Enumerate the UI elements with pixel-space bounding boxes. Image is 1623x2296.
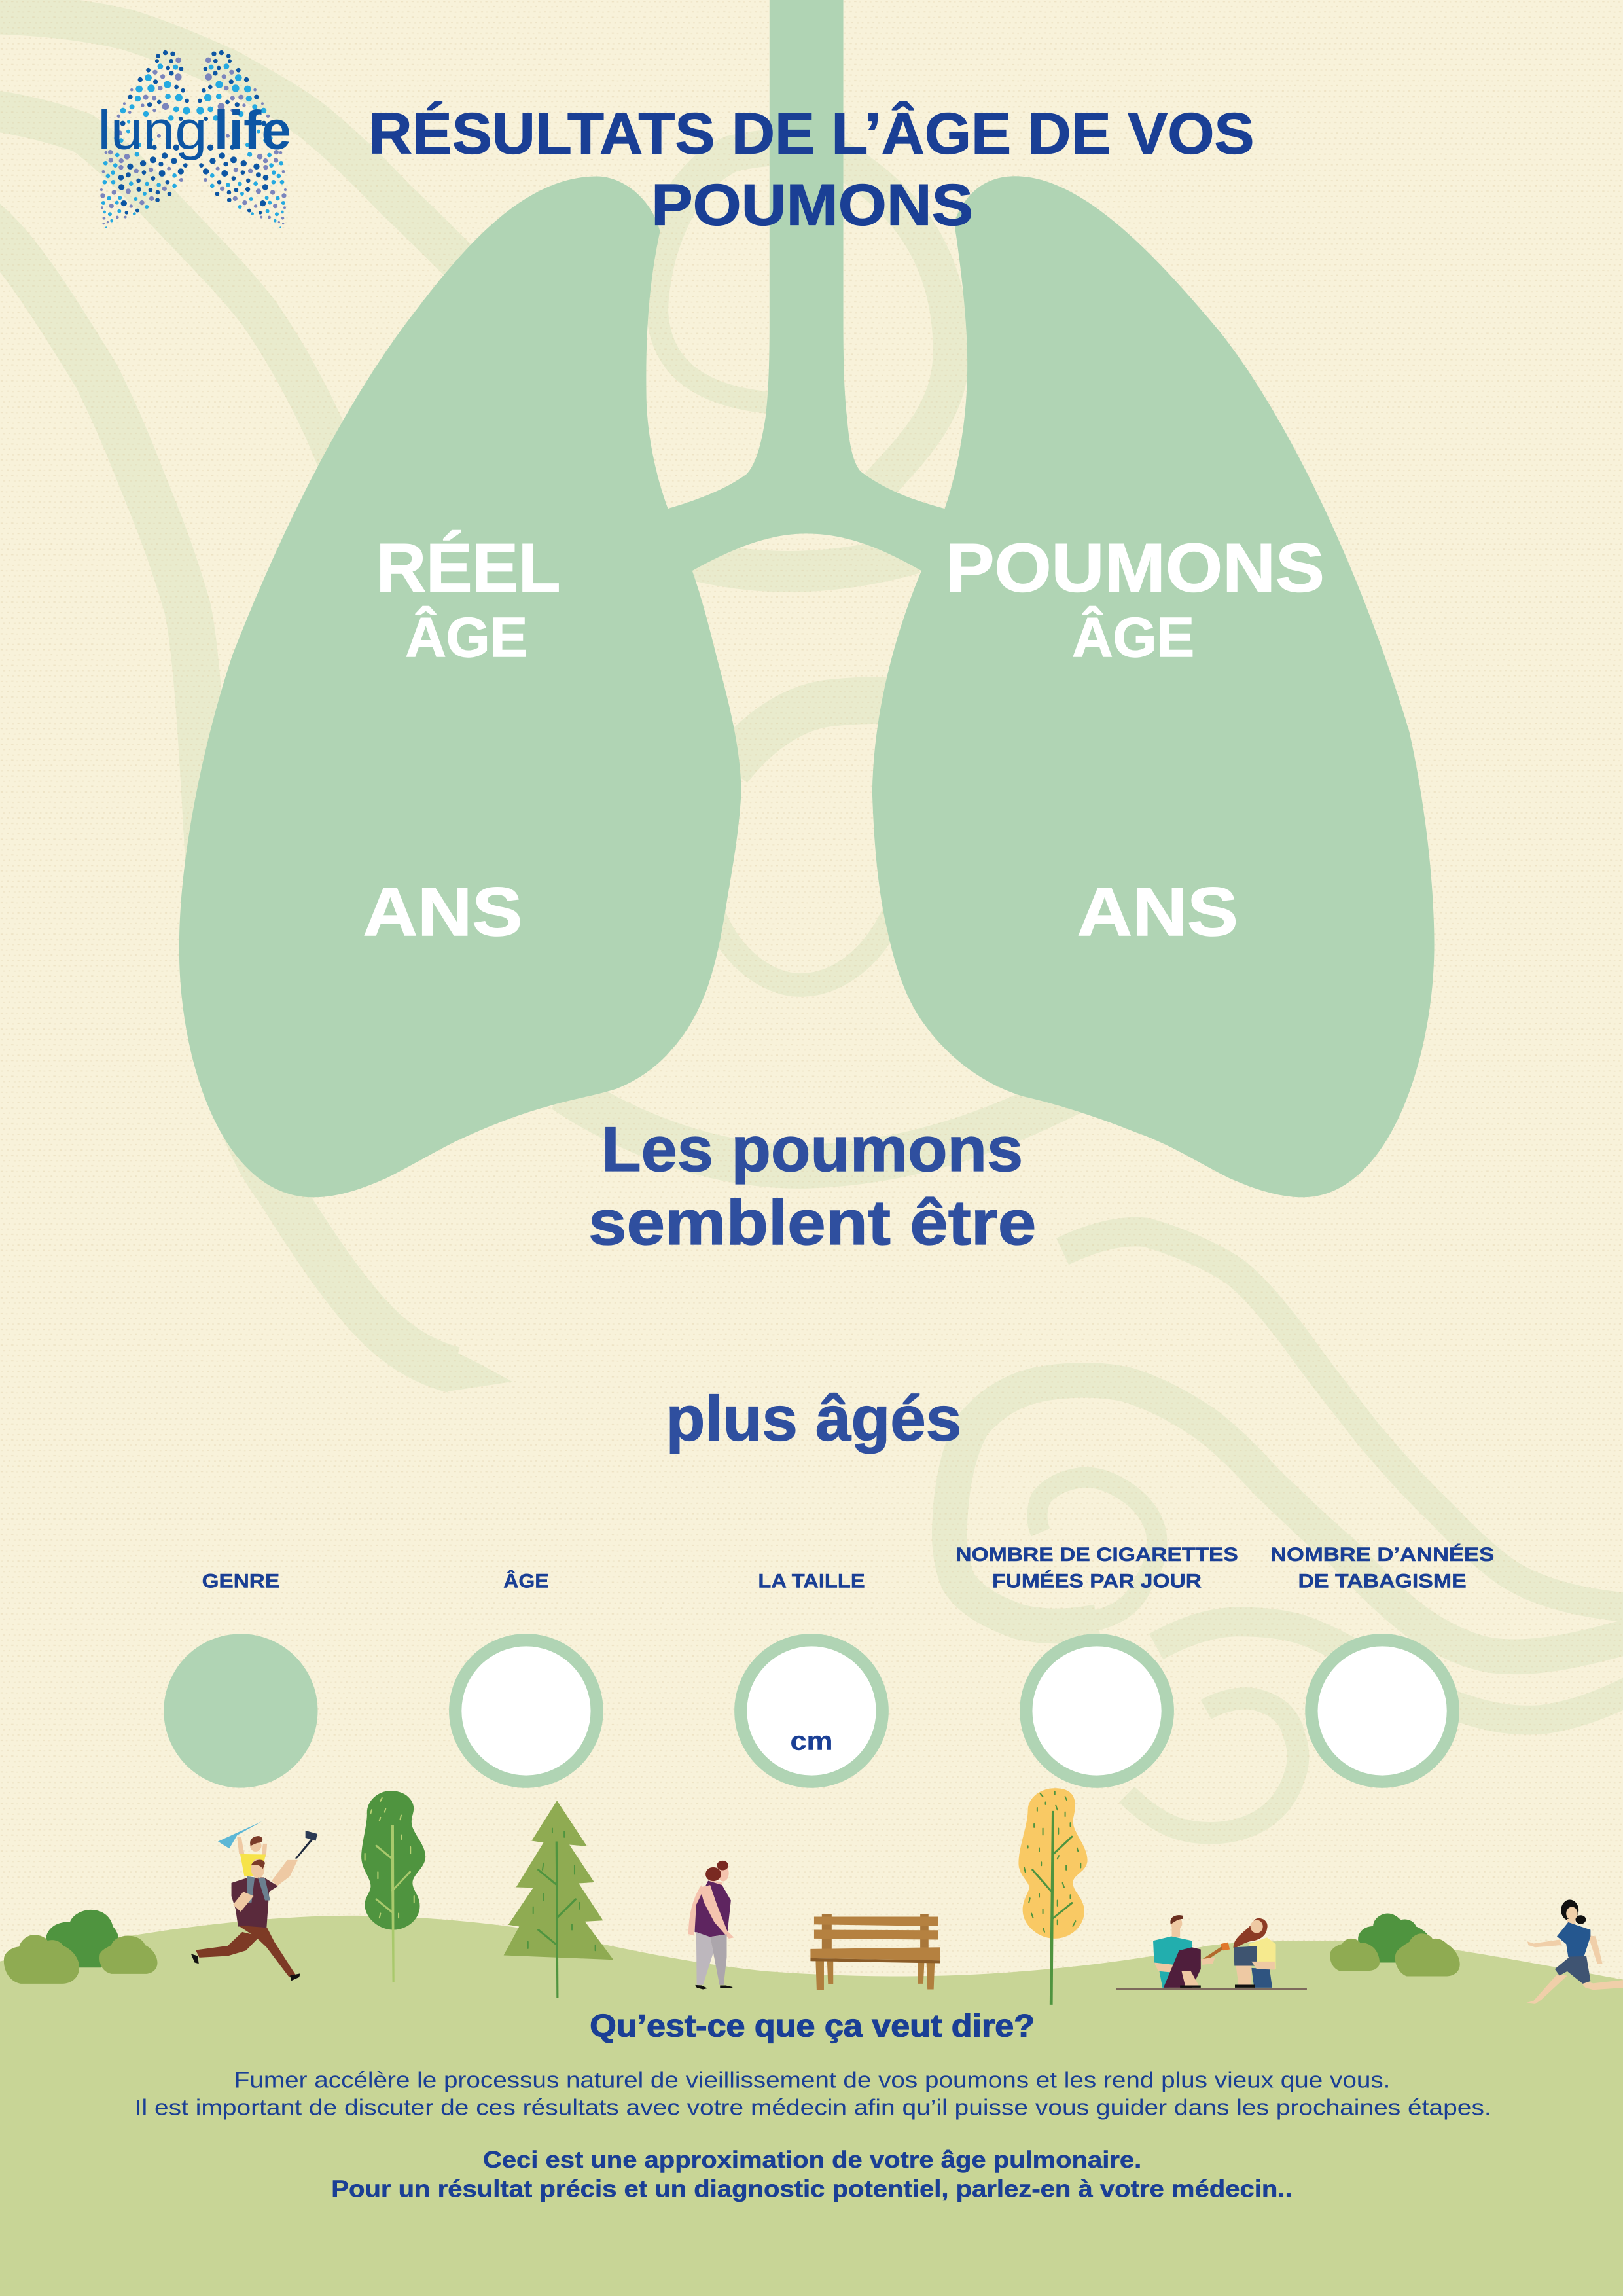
yellow tree	[1018, 1788, 1088, 2005]
green tree	[361, 1791, 425, 1982]
right lung label: lung age: ÂGE	[1072, 606, 1194, 669]
metric: cigarettes per day: NOMBRE DE CIGARETTES	[955, 1544, 1238, 1566]
metric: height: cm	[791, 1727, 832, 1756]
park scene, right half	[810, 1788, 1623, 2005]
bench	[810, 1914, 940, 1990]
metric: years smoking: NOMBRE D’ANNÉES	[1270, 1543, 1494, 1566]
metric: height: LA TAILLE	[758, 1570, 865, 1592]
running woman	[1526, 1900, 1623, 2004]
park scene, left half	[0, 1791, 1623, 2296]
bushes right	[1330, 1914, 1460, 1977]
explanation heading: Qu’est-ce que ça veut dire?	[590, 2008, 1035, 2043]
metric: age: ÂGE	[503, 1570, 549, 1592]
walking woman	[688, 1861, 734, 1990]
metric: cigarettes per day: FUMÉES PAR JOUR	[992, 1570, 1202, 1592]
background swirls	[0, 13, 1623, 1833]
explanation paragraph	[135, 2068, 1491, 2120]
metric: years smoking: DE TABAGISME	[1298, 1570, 1467, 1592]
result statement: Les poumons	[601, 1115, 1023, 1185]
couple with guitar on mat	[1116, 1915, 1307, 1990]
logo: lunglife	[98, 50, 291, 228]
title: RÉSULTATS DE L’ÂGE DE VOS	[369, 100, 1254, 166]
man with child on shoulders	[191, 1821, 317, 1981]
logo: wordmark	[98, 99, 291, 160]
result statement: semblent être	[588, 1188, 1036, 1258]
right value unit: ANS	[1077, 874, 1238, 950]
explanation paragraph: Fumer accélère le processus naturel de vieillissement de vos poumons et les rend plus vieux que vous.	[234, 2068, 1390, 2092]
logo: wordmark: life	[214, 99, 291, 160]
title	[369, 100, 1254, 237]
left value unit: ANS	[363, 874, 522, 950]
left lung label: real age: RÉEL	[376, 529, 560, 606]
disclaimer: Ceci est une approximation de votre âge pulmonaire.	[483, 2147, 1141, 2173]
metric: genre: GENRE	[202, 1570, 279, 1592]
right lung label: lung age	[946, 529, 1325, 669]
lungs illustration	[179, 0, 1435, 1197]
disclaimer	[331, 2147, 1293, 2202]
metric: years smoking	[1270, 1543, 1494, 1782]
bushes left	[4, 1910, 158, 1984]
title: POUMONS	[651, 171, 973, 237]
fir tree	[504, 1801, 613, 1998]
disclaimer: Pour un résultat précis et un diagnostic potentiel, parlez-en à votre médecin..	[331, 2176, 1293, 2202]
result statement	[588, 1115, 1036, 1454]
metric: height	[741, 1570, 882, 1782]
metric: age	[455, 1570, 597, 1782]
ground hill	[0, 1916, 1623, 2296]
metric: cigarettes per day	[955, 1544, 1238, 1782]
logo: wordmark: lung	[98, 99, 207, 160]
explanation paragraph: Il est important de discuter de ces résultats avec votre médecin afin qu’il puisse vous guider dans les prochaines étapes.	[135, 2095, 1491, 2120]
metric: genre	[164, 1570, 317, 1788]
left lung label: real age	[376, 529, 560, 669]
logo: right lung dots	[196, 50, 287, 228]
logo: left lung dots	[100, 50, 190, 228]
right lung label: lung age: POUMONS	[946, 529, 1325, 606]
left lung label: real age: ÂGE	[405, 606, 527, 669]
result statement: plus âgés	[666, 1384, 961, 1454]
